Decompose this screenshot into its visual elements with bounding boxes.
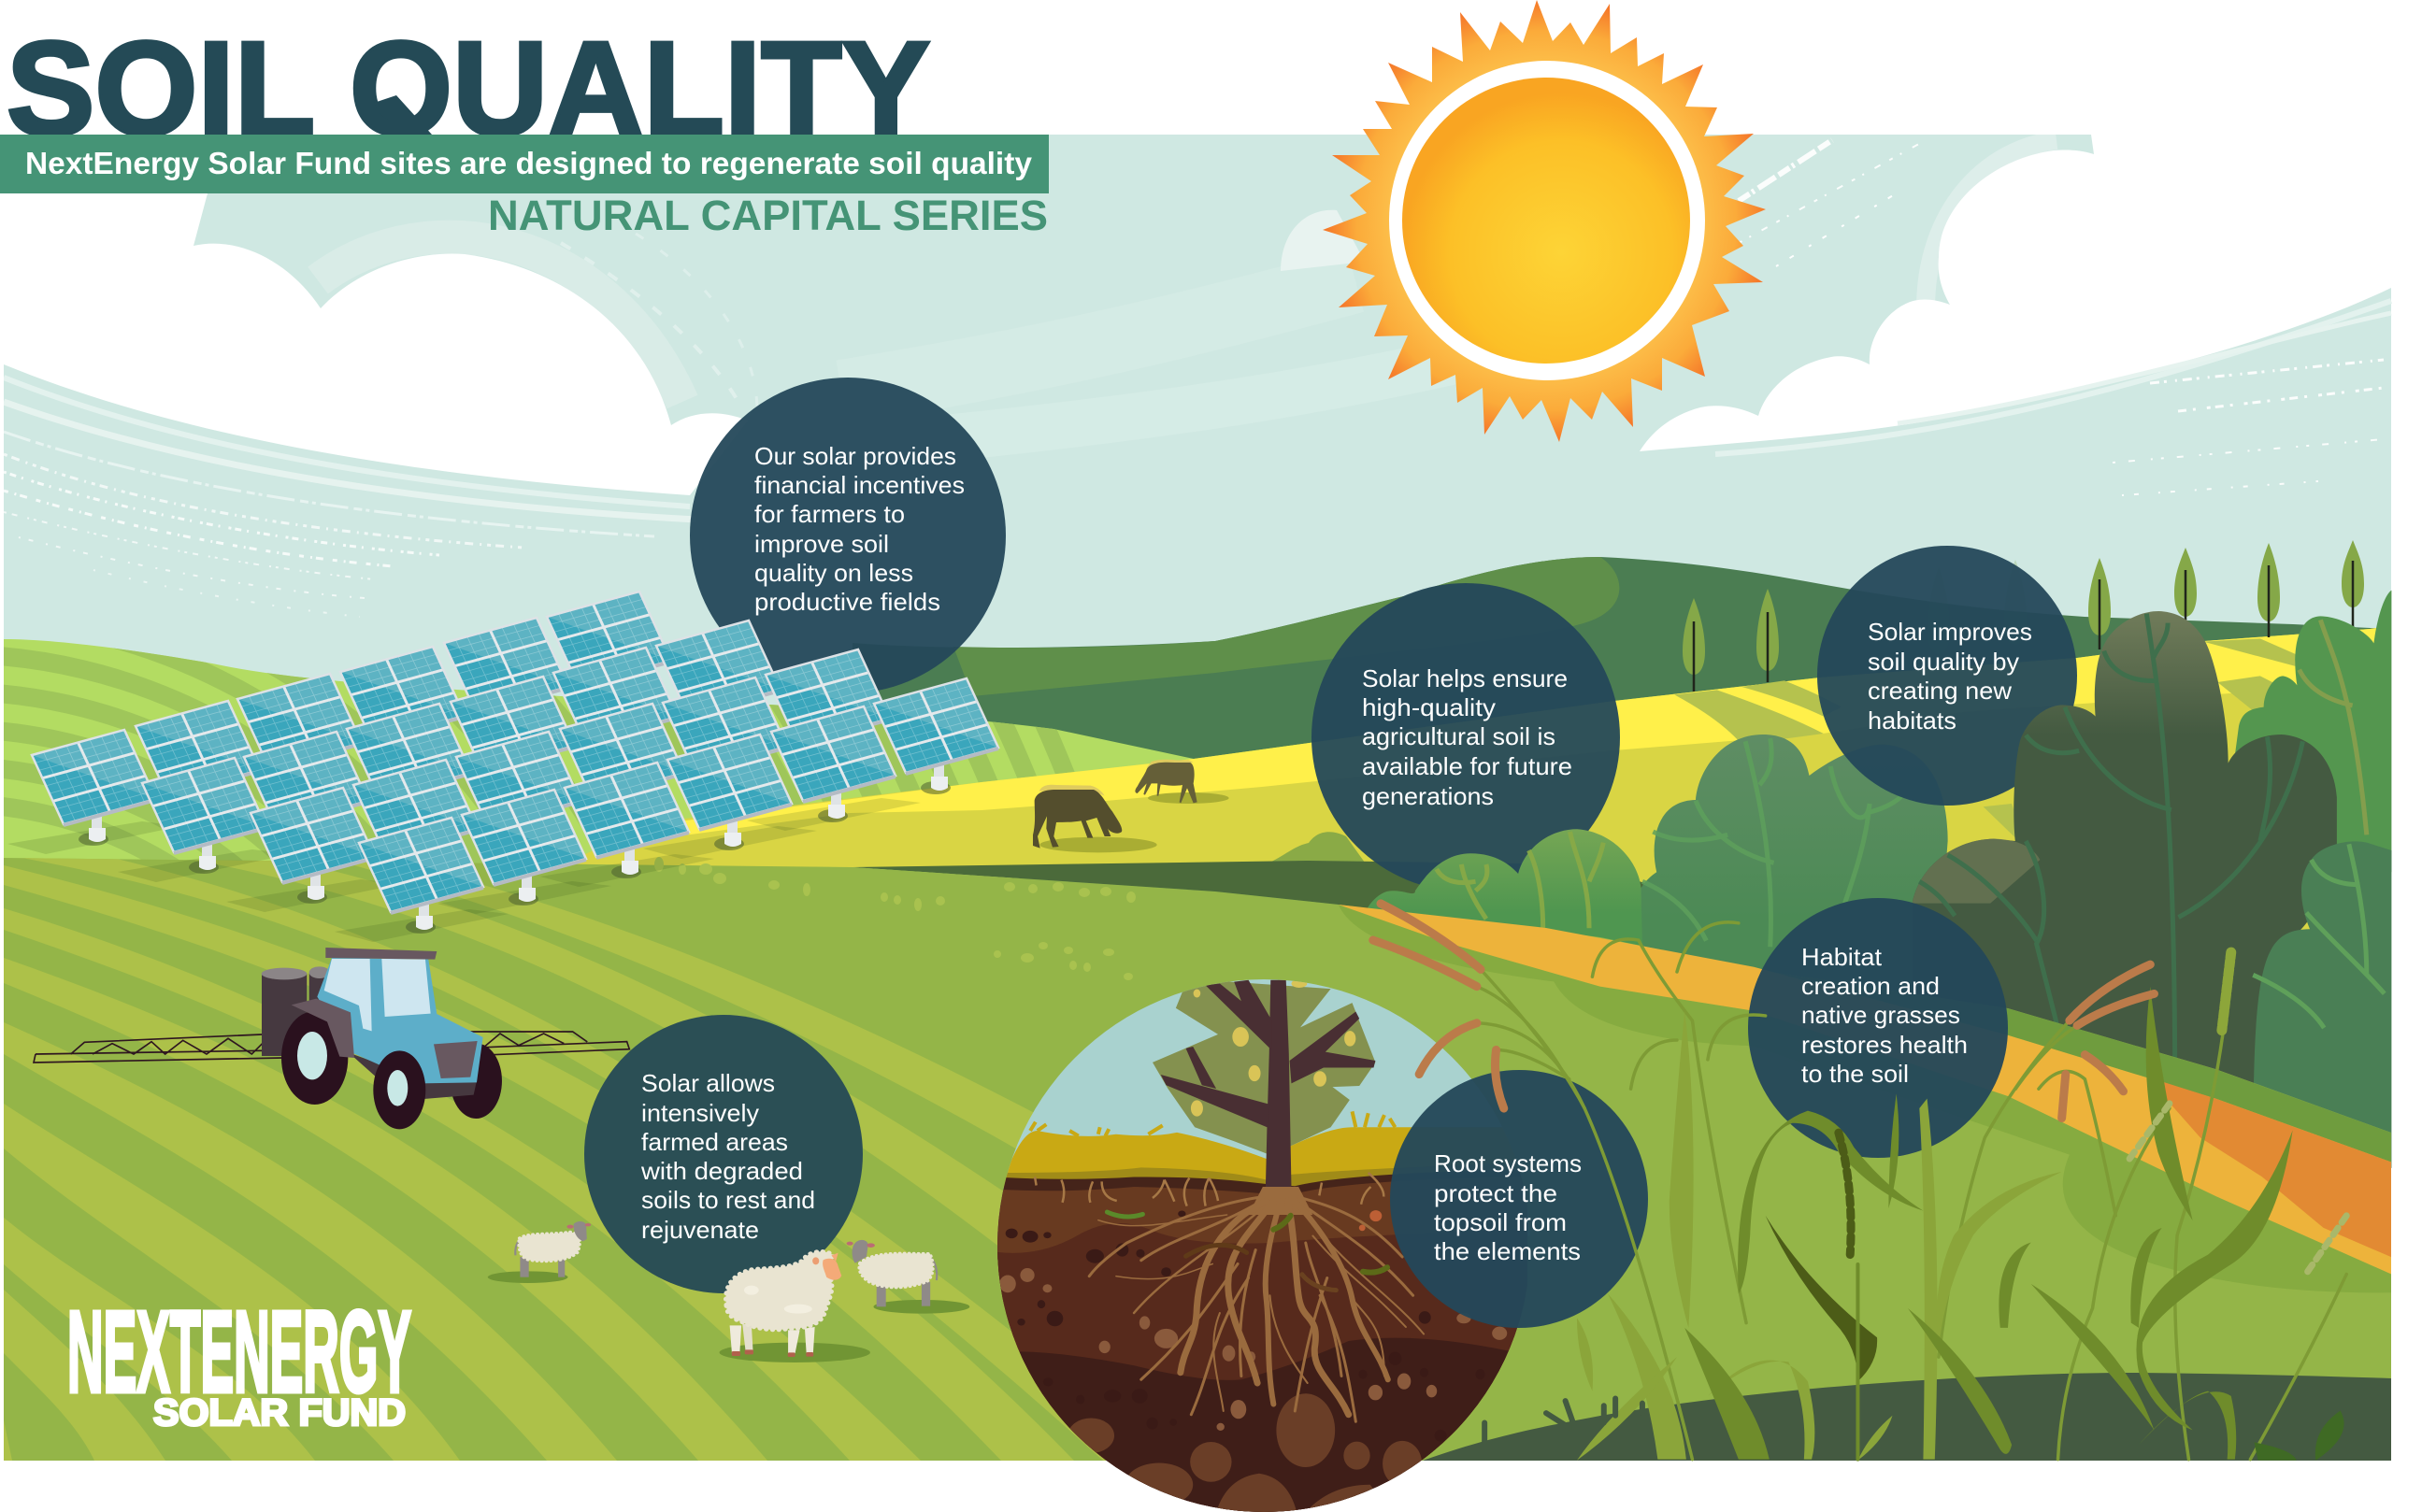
pale plumes (2128, 952, 2346, 1277)
callout: Solar allows (584, 1015, 863, 1293)
sheep: small right (847, 1240, 969, 1314)
text: NEXTENERGY (67, 1289, 411, 1417)
sheep group (488, 1221, 969, 1362)
callout: Solar helps ensure: generations (1362, 782, 1494, 810)
callout: Solar improves: soil quality by (1868, 648, 2019, 676)
yellow field (561, 626, 2391, 934)
subtitle banner (0, 135, 1049, 193)
small cloud behind sun (1281, 210, 1365, 271)
hill: dark green background (853, 557, 2391, 1177)
callout: Habitat creation: to the soil (1801, 1060, 1909, 1088)
sheep: small left (488, 1221, 591, 1283)
grass blades: mid olive (1684, 987, 2293, 1460)
callout: Solar allows: soils to rest and (641, 1186, 815, 1214)
tractor with sprayer (34, 948, 629, 1129)
series heading: NATURAL CAPITAL SERIES (488, 192, 1048, 239)
sky in circle (997, 979, 1471, 1235)
callout: Solar allows: intensively (641, 1099, 759, 1127)
foreground grasses (1373, 904, 2346, 1461)
sun (1323, 0, 1766, 442)
cloud: right (1640, 135, 2391, 451)
callout: Root systems: Root systems (1434, 1149, 1582, 1177)
callout: Our solar provides: quality on less (754, 559, 913, 587)
tree: right green (2231, 591, 2391, 872)
callout: Our solar provides: improve soil (754, 530, 889, 558)
callout: Solar improves: habitats (1868, 706, 1956, 735)
ground tufts (1484, 1398, 1642, 1442)
field stripes (0, 832, 1168, 1461)
green bank beside road (1339, 905, 2391, 1292)
logo: NextEnergy Solar Fund (67, 1289, 411, 1434)
callout: Habitat creation: restores health (1801, 1031, 1968, 1059)
callout: Solar allows: rejuvenate (641, 1216, 759, 1244)
hill: striped field left (4, 639, 1194, 878)
solar array shadows (7, 798, 921, 942)
tree canopy (1153, 980, 1375, 1153)
soil layers (983, 1169, 1527, 1512)
callout: Our solar provides: productive fields (754, 588, 940, 616)
stones and pebbles (999, 1210, 1507, 1512)
grass stems (1477, 922, 2346, 1460)
callout: Our solar provides (690, 378, 1006, 693)
brown seed heads (1373, 904, 2154, 1118)
callout: Solar allows: farmed areas (641, 1128, 788, 1156)
callout: Habitat creation: Habitat (1801, 943, 1883, 971)
hill: dark foreground (1423, 1373, 2391, 1461)
tree trunk and branches (1161, 980, 1375, 1187)
cypress trees (1683, 540, 2364, 692)
tree: middle (1628, 735, 1948, 1028)
callout: Root systems: topsoil from (1434, 1208, 1567, 1236)
logo: NextEnergy Solar Fund: SOLAR FUND (153, 1392, 406, 1434)
pears (1191, 979, 1355, 1117)
callout: Solar allows: with degraded (640, 1157, 803, 1185)
callout: Solar helps ensure: Solar helps ensure (1362, 664, 1568, 692)
callout: Root systems: protect the (1434, 1179, 1557, 1207)
scattered field flowers (654, 857, 1136, 980)
worms and bugs (1107, 1212, 1387, 1291)
distant bush and dark field wedge (853, 832, 1963, 991)
callout: Solar helps ensure: high-quality (1362, 693, 1496, 721)
callout: Habitat creation (1748, 898, 2008, 1158)
callout: Habitat creation: creation and (1801, 972, 1940, 1000)
sheep: large centre (720, 1251, 870, 1362)
callout: Solar helps ensure: available for future (1362, 752, 1572, 780)
cows (1033, 760, 1229, 852)
callout: Root systems: the elements (1434, 1237, 1581, 1265)
yellow grass (1004, 1110, 1412, 1187)
tree: large dark (1913, 611, 2367, 1168)
callout: Habitat creation: native grasses (1801, 1001, 1960, 1029)
callout: Our solar provides: Our solar provides (754, 442, 956, 470)
tree: lower right (2253, 841, 2391, 1168)
callout: Solar helps ensure (1311, 583, 1620, 892)
sky brush texture (318, 140, 2384, 495)
orange road (1339, 905, 2391, 1274)
subtitle banner: NextEnergy Solar Fund sites are designed to regenerate soil quality (25, 146, 1033, 180)
foreground field (0, 832, 2422, 1461)
callout: Our solar provides: financial incentives (754, 471, 965, 499)
grass blades: pale (1577, 1011, 2062, 1461)
callout: Solar improves: Solar improves (1868, 618, 2032, 646)
low plant leaves (2254, 1411, 2344, 1461)
cloud streaks: right swoosh (1715, 301, 2391, 454)
callout: Solar improves: creating new (1868, 677, 2012, 705)
sprayer booms (34, 1032, 629, 1063)
cloud: left (0, 193, 748, 495)
callout: Solar helps ensure: agricultural soil is (1362, 722, 1555, 750)
soil cross-section with tree and roots (997, 979, 1517, 1512)
shallow roots (1035, 1173, 1383, 1206)
cloud streaks: left swoosh (4, 378, 696, 617)
main roots (1089, 1187, 1424, 1421)
solar panel array (32, 592, 998, 934)
dark blades and seed beads (1766, 1133, 1877, 1460)
callout: Solar allows: Solar allows (641, 1069, 775, 1097)
tree: small (1358, 829, 1642, 950)
title: SOIL QUALITY (7, 15, 930, 164)
callout: Our solar provides: for farmers to (754, 500, 905, 528)
callout: Root systems (1390, 1070, 1648, 1328)
hill: lighter overlay (953, 557, 1619, 696)
callout: Solar improves (1817, 546, 2077, 806)
